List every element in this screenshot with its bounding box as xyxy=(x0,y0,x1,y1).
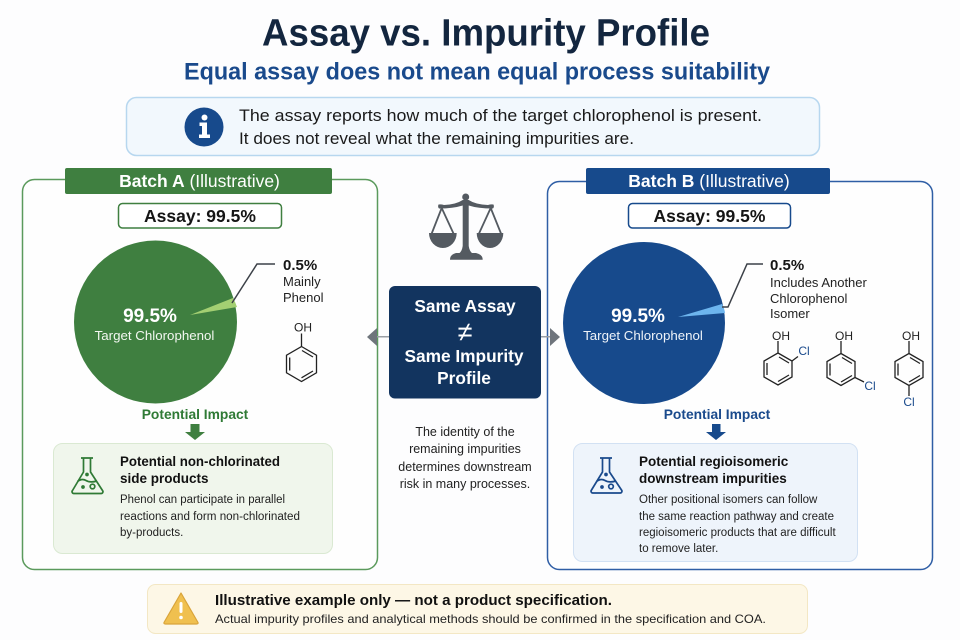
Batch B pie chart xyxy=(563,242,725,404)
Batch B impurity label xyxy=(770,257,868,321)
subtitle: Equal assay does not mean equal process suitability xyxy=(184,58,771,86)
Batch B card body: to remove later. xyxy=(639,543,718,555)
Batch A header: Batch A (Illustrative) xyxy=(119,171,280,191)
Batch A pie chart: Target Chlorophenol xyxy=(95,328,214,343)
molecule: 2-chlorophenol xyxy=(764,329,810,385)
Batch B card body: Other positional isomers can follow xyxy=(639,494,818,506)
footer disclaimer xyxy=(148,584,808,634)
center caption: The identity of the xyxy=(415,425,515,439)
molecule: phenol: OH xyxy=(294,320,312,334)
Batch B card heading: downstream impurities xyxy=(639,471,787,486)
Batch A impact card xyxy=(54,444,332,554)
Batch A pie chart xyxy=(74,240,237,404)
Batch B leader line xyxy=(722,264,763,307)
Batch B card body: the same reaction pathway and create xyxy=(639,511,834,523)
info text: It does not reveal what the remaining impurities are. xyxy=(239,129,634,148)
center caption: remaining impurities xyxy=(409,442,521,456)
Batch A impurity label: 0.5% xyxy=(283,257,317,274)
Batch B header xyxy=(586,168,830,194)
icon: warning xyxy=(164,593,198,624)
molecule: 4-chlorophenol: Cl xyxy=(903,395,915,409)
Batch A header xyxy=(65,168,332,194)
title: Assay vs. Impurity Profile xyxy=(262,12,710,54)
molecule: 2-chlorophenol: OH xyxy=(772,329,790,343)
icon: flask xyxy=(72,458,103,494)
arrow: Batch A impact xyxy=(185,424,205,440)
Batch B impact card xyxy=(574,444,858,562)
arrow: toward Batch A xyxy=(367,328,390,346)
icon: flask xyxy=(591,458,622,493)
center message box: Same Assay xyxy=(414,296,516,316)
Batch A impurity label: Phenol xyxy=(283,290,324,305)
Batch B impurity label: Chlorophenol xyxy=(770,291,847,306)
Batch A card heading: side products xyxy=(120,471,209,486)
center caption: risk in many processes. xyxy=(400,477,530,491)
Batch A card body: by-products. xyxy=(120,527,183,539)
Batch B impurity label: Includes Another xyxy=(770,275,868,290)
info text: The assay reports how much of the target chlorophenol is present. xyxy=(239,106,762,125)
footer heading: Illustrative example only — not a product specification. xyxy=(215,592,612,609)
center caption: determines downstream xyxy=(398,460,532,474)
icon: balance scales xyxy=(429,194,503,260)
molecule: 2-chlorophenol: Cl xyxy=(798,344,810,358)
molecule: phenol xyxy=(286,320,316,382)
panel: Batch A xyxy=(22,168,378,570)
center message box: Same Impurity xyxy=(404,346,524,366)
Batch B assay badge: Assay: 99.5% xyxy=(654,206,766,226)
Batch A impurity label: Mainly xyxy=(283,274,321,289)
molecule: 3-chlorophenol: OH xyxy=(835,329,853,343)
molecule: 3-chlorophenol xyxy=(827,329,876,393)
Batch B card body: regioisomeric products that are difficult xyxy=(639,527,836,539)
Batch B header: Batch B (Illustrative) xyxy=(628,171,790,191)
molecule: 4-chlorophenol xyxy=(895,329,923,409)
Batch A card body: Phenol can participate in parallel xyxy=(120,494,285,506)
Batch B pie chart: Target Chlorophenol xyxy=(583,328,703,343)
Batch A pie chart: 99.5% xyxy=(123,306,177,327)
footer note: Actual impurity profiles and analytical methods should be confirmed in the specification and COA. xyxy=(215,612,766,626)
Batch B potential impact label: Potential Impact xyxy=(664,407,771,422)
Batch B assay badge xyxy=(628,204,790,228)
Batch A leader line xyxy=(232,264,275,303)
Batch A card body: reactions and form non-chlorinated xyxy=(120,511,300,523)
center message box: ≠ xyxy=(458,317,472,347)
Batch A card heading: Potential non-chlorinated xyxy=(120,454,280,469)
molecule: 3-chlorophenol: Cl xyxy=(864,379,876,393)
Batch A impurity label xyxy=(283,257,324,305)
center message box: Profile xyxy=(437,368,491,388)
Batch B pie chart: 99.5% xyxy=(611,306,665,327)
Batch A assay badge: Assay: 99.5% xyxy=(144,206,256,226)
Batch A assay badge xyxy=(118,204,282,228)
Batch B impurity label: Isomer xyxy=(770,306,810,321)
arrow: toward Batch B xyxy=(541,328,560,346)
icon: info xyxy=(184,108,224,146)
Batch A potential impact label: Potential Impact xyxy=(142,407,249,422)
panel: Batch B xyxy=(548,168,932,570)
center message box xyxy=(389,286,541,398)
molecule: 4-chlorophenol: OH xyxy=(902,329,920,343)
info callout xyxy=(126,98,820,156)
arrow: Batch B impact xyxy=(706,424,726,440)
Batch B impurity label: 0.5% xyxy=(770,257,804,274)
Batch B card heading: Potential regioisomeric xyxy=(639,454,789,469)
